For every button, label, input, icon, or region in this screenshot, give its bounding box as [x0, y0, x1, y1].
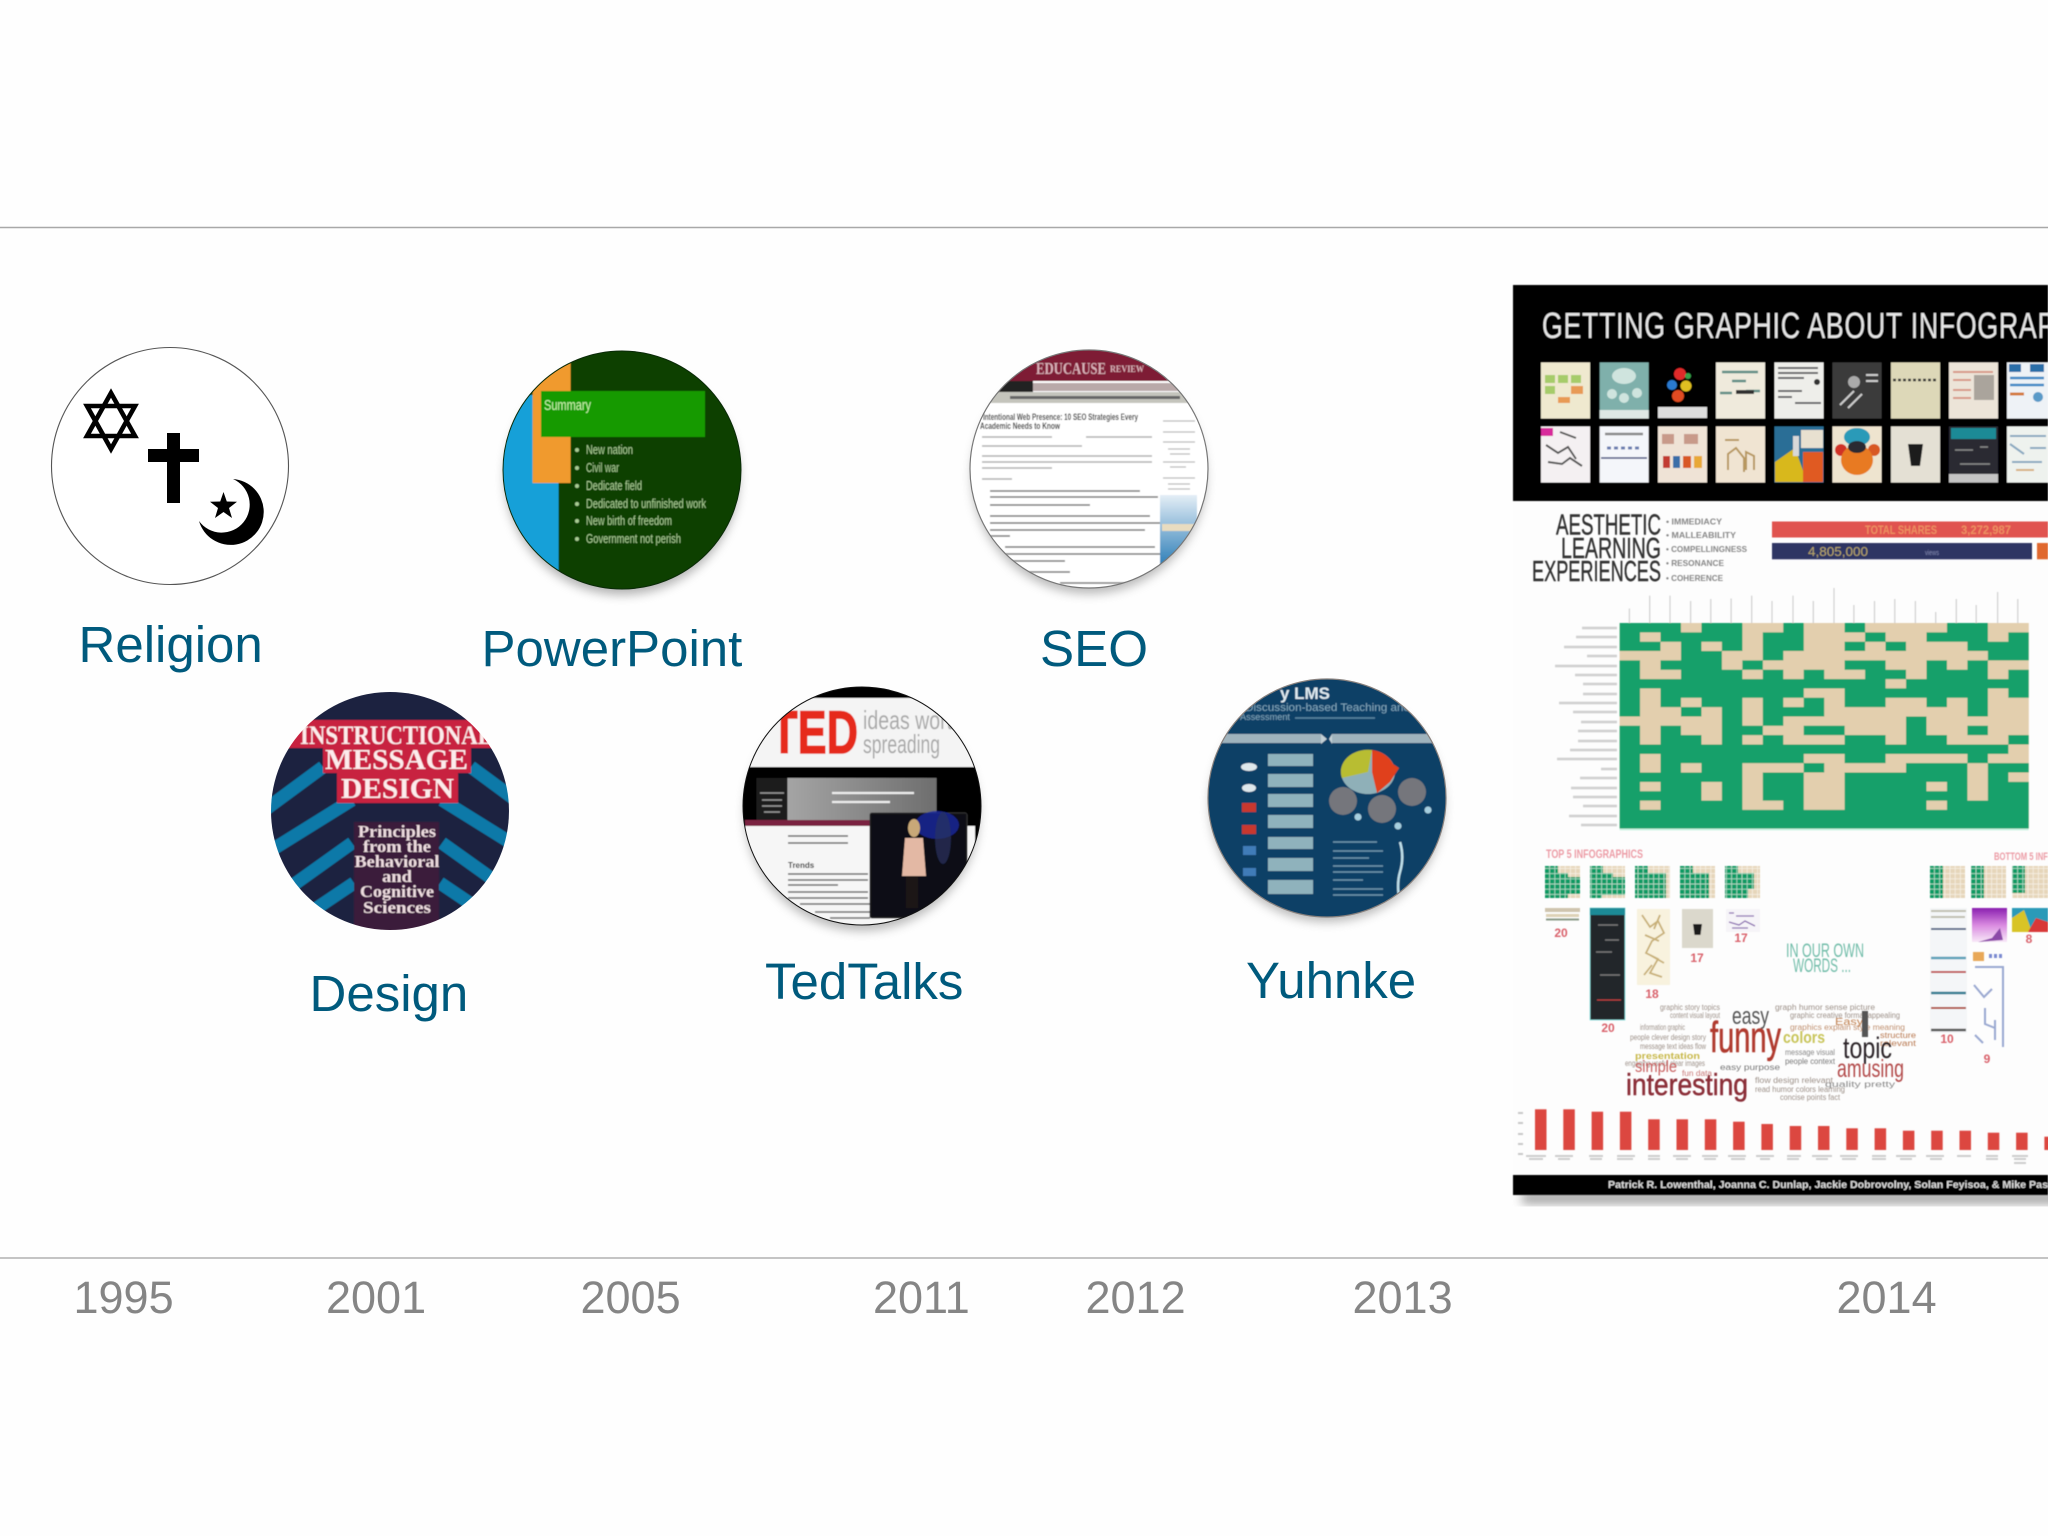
- list: aesthetic qualities: • IMMEDIACY: [1666, 516, 1722, 526]
- mini ratings: bottom 5: [1930, 866, 2048, 898]
- thumbnails: top 5 with scores: 17: [1734, 931, 1748, 945]
- word cloud: colors: [1783, 1028, 1825, 1047]
- circle image: Instructional Message Design book cover: Sciences: [363, 898, 431, 917]
- word cloud: relevant: [1880, 1039, 1917, 1048]
- timeline year: 2014: 2014: [1836, 1272, 1937, 1323]
- circle image: Instructional Message Design book cover: from the: [363, 837, 431, 856]
- icon: crescent and star: [199, 479, 264, 545]
- icon: religion symbols circle: [52, 348, 288, 584]
- circle image: PowerPoint slide: [500, 348, 744, 595]
- word cloud: topic: [1843, 1032, 1892, 1065]
- word cloud: graph humor sense picture: [1775, 1003, 1876, 1012]
- icon: star of David: [87, 393, 135, 449]
- circle image: TED talk screenshot: Trends: [788, 861, 815, 870]
- circle image: SEO article screenshot: REVIEW: [1110, 364, 1144, 374]
- word cloud: structure: [1880, 1031, 1917, 1040]
- word cloud: flow design relevant: [1755, 1076, 1834, 1085]
- word cloud: simple: [1635, 1057, 1677, 1076]
- word cloud: people clever design story: [1630, 1033, 1706, 1042]
- thumbnails: top 5 with scores: 20: [1554, 926, 1568, 940]
- word cloud: fun data: [1682, 1069, 1713, 1078]
- circle image: PowerPoint slide: Civil war: [586, 461, 619, 475]
- word cloud: easy: [1732, 1003, 1769, 1030]
- list: aesthetic qualities: • RESONANCE: [1666, 558, 1724, 568]
- word cloud: message text ideas flow: [1640, 1042, 1706, 1051]
- word cloud: interesting: [1626, 1067, 1748, 1102]
- circle image: Instructional Message Design book cover: [271, 692, 509, 930]
- list: aesthetic qualities: [1666, 516, 1747, 583]
- circle image: Yuhnke infographic: Assessment: [1240, 712, 1290, 722]
- circle image: Instructional Message Design book cover: MESSAGE: [325, 745, 468, 776]
- thumbnail grid: [1541, 362, 2048, 482]
- heading: Aesthetic Learning Experiences: [1532, 510, 1661, 588]
- circle image: Instructional Message Design book cover: DESIGN: [341, 773, 454, 805]
- timeline year: 2001: 2001: [326, 1272, 426, 1323]
- word cloud: information graphic: [1640, 1023, 1685, 1032]
- stat bars: shares and views: TOTAL SHARES: [1865, 523, 1937, 537]
- circle image: TED talk screenshot: spreading: [863, 729, 940, 759]
- word cloud: graphic creative format appealing: [1790, 1011, 1900, 1020]
- word cloud: graphics explain style meaning: [1790, 1023, 1905, 1032]
- timeline year: 2011: 2011: [873, 1272, 970, 1323]
- label: Design: Design: [310, 965, 468, 1022]
- circle image: Yuhnke infographic: Discussion-based Teaching and: [1245, 702, 1410, 714]
- heading: in our own words: [1786, 941, 1864, 977]
- circle image: Yuhnke infographic: [1206, 677, 1450, 922]
- circle image: PowerPoint slide: Government not perish: [586, 532, 681, 546]
- word cloud: Easy: [1835, 1017, 1863, 1028]
- heading: in our own words: IN OUR OWN: [1786, 941, 1864, 962]
- heatmap chart: [1555, 588, 2029, 830]
- circle image: PowerPoint slide: Summary: [544, 397, 591, 414]
- word cloud: read humor colors learning: [1755, 1085, 1845, 1094]
- circle image: PowerPoint slide: New nation: [586, 443, 633, 457]
- circle image: TED talk screenshot: [741, 685, 985, 936]
- thumbnails: top 5 with scores: [1545, 908, 1760, 1035]
- panel: Getting Graphic About Infographics poster: [1513, 285, 2048, 1204]
- timeline year: 2013: 2013: [1352, 1272, 1453, 1323]
- heading: Aesthetic Learning Experiences: EXPERIENCES: [1532, 556, 1661, 588]
- word cloud: easy purpose: [1720, 1063, 1781, 1072]
- circle image: SEO article screenshot: EDUCAUSE: [1036, 359, 1106, 378]
- label: PowerPoint: PowerPoint: [482, 620, 742, 677]
- circle image: TED talk screenshot: ideas worth: [863, 705, 963, 735]
- list: aesthetic qualities: • MALLEABILITY: [1666, 530, 1736, 540]
- timeline year: 1995: 1995: [74, 1272, 174, 1323]
- word cloud: quality pretty: [1825, 1080, 1895, 1089]
- timeline year: 2012: 2012: [1086, 1272, 1186, 1323]
- heading: Aesthetic Learning Experiences: LEARNING: [1561, 533, 1661, 565]
- word cloud: graphic story topics: [1660, 1003, 1720, 1012]
- footer band with authors: [1513, 1175, 2048, 1195]
- stat bars: shares and views: views: [1925, 550, 1939, 557]
- heading: in our own words: WORDS ...: [1793, 956, 1851, 977]
- stat bars: shares and views: 4,805,000: [1808, 544, 1868, 559]
- word cloud: content visual layout: [1670, 1011, 1721, 1020]
- word cloud: presentation: [1635, 1051, 1700, 1061]
- circle image: Instructional Message Design book cover: and: [382, 867, 413, 886]
- circle image: Instructional Message Design book cover: Cognitive: [360, 882, 434, 901]
- word cloud: engaging useful clear images: [1625, 1059, 1705, 1068]
- thumbnails: bottom 5 with scores: [1930, 908, 2048, 1066]
- list: aesthetic qualities: • COHERENCE: [1666, 573, 1723, 583]
- footer band with authors: Patrick R. Lowenthal, Joanna C. Dunlap, Jackie Dobrovolny, Solan Feyisoa, & Mike Pas: [1608, 1179, 2048, 1191]
- circle image: SEO article screenshot: [968, 348, 1213, 594]
- thumbnails: top 5 with scores: 18: [1645, 987, 1659, 1001]
- circle image: Instructional Message Design book cover: INSTRUCTIONAL: [300, 721, 493, 750]
- heading: Aesthetic Learning Experiences: AESTHETIC: [1556, 510, 1661, 542]
- stat bars: shares and views: 3,272,987: [1961, 523, 2011, 537]
- circle image: TED talk screenshot: TED: [771, 699, 858, 766]
- mini ratings: top 5: [1545, 866, 1760, 898]
- thumbnails: top 5 with scores: 20: [1601, 1021, 1615, 1035]
- label: SEO: SEO: [1040, 620, 1148, 677]
- poster header with title and thumbnails: [1513, 285, 2048, 501]
- icon: cross: [148, 433, 199, 503]
- circle image: SEO article screenshot: Intentional Web Presence: 10 SEO Strategies Every: [983, 412, 1138, 423]
- circle image: Instructional Message Design book cover: Principles: [358, 822, 436, 841]
- list: aesthetic qualities: • COMPELLINGNESS: [1666, 544, 1747, 554]
- circle image: PowerPoint slide: Dedicate field: [586, 479, 642, 493]
- circle image: PowerPoint slide: Dedicated to unfinished work: [586, 497, 707, 511]
- circle image: SEO article screenshot: Academic Needs to Know: [980, 421, 1060, 432]
- word cloud: people context: [1785, 1057, 1836, 1066]
- thumbnails: bottom 5 with scores: 10: [1940, 1032, 1954, 1046]
- word cloud: message visual: [1785, 1048, 1835, 1057]
- word cloud: [1625, 1003, 1917, 1102]
- word cloud: concise points fact: [1780, 1093, 1841, 1102]
- circle image: Yuhnke infographic: y LMS: [1280, 684, 1330, 703]
- timeline year: 2005: 2005: [580, 1272, 681, 1323]
- label: Yuhnke: Yuhnke: [1246, 952, 1416, 1009]
- thumbnails: bottom 5 with scores: 9: [1984, 1052, 1991, 1066]
- circle image: PowerPoint slide: New birth of freedom: [586, 514, 672, 528]
- stat bars: shares and views: [1772, 522, 2048, 559]
- thumbnails: bottom 5 with scores: 8: [2026, 932, 2033, 946]
- thumbnails: top 5 with scores: 17: [1690, 951, 1704, 965]
- label: TedTalks: TedTalks: [765, 953, 963, 1010]
- word cloud: amusing: [1837, 1055, 1904, 1083]
- label: Religion: Religion: [78, 616, 263, 673]
- heading: top 5 infographics: TOP 5 INFOGRAPHICS: [1546, 849, 1643, 861]
- word cloud: funny: [1710, 1013, 1781, 1062]
- bar chart: ratings: [1518, 1109, 2048, 1163]
- circle image: Instructional Message Design book cover: Behavioral: [354, 852, 440, 871]
